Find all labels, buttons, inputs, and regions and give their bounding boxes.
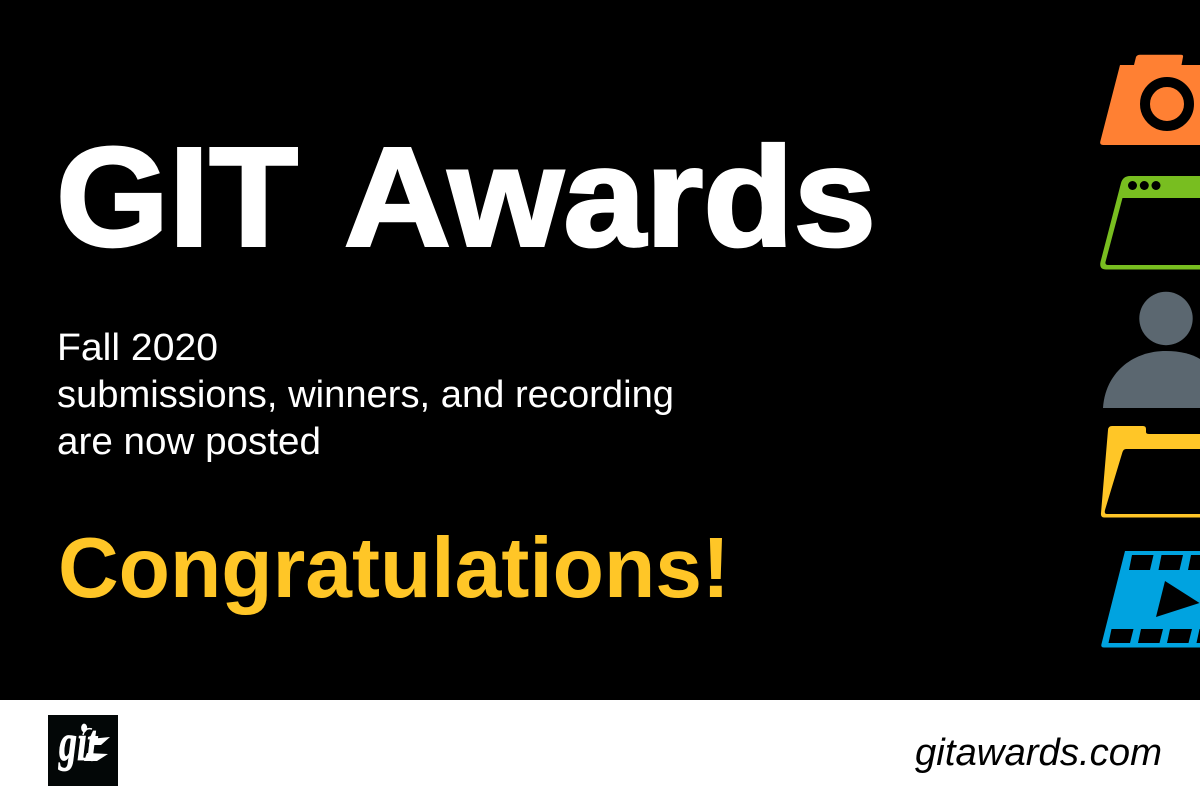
title: GIT — [56, 118, 298, 276]
logo — [48, 715, 118, 786]
congratulations heading: Congratulations! — [58, 521, 730, 616]
title — [56, 118, 876, 276]
announcement text — [57, 327, 674, 463]
icon: browser window — [1100, 176, 1200, 270]
website url: gitawards.com — [915, 732, 1162, 774]
icon: person — [1103, 292, 1200, 408]
announcement text: submissions, winners, and recording — [57, 374, 674, 416]
footer band — [0, 700, 1200, 800]
title: Awards — [344, 118, 876, 276]
icon: film strip — [1101, 551, 1200, 648]
announcement text: Fall 2020 — [57, 327, 218, 369]
logo: git — [58, 715, 98, 772]
announcement text: are now posted — [57, 421, 321, 463]
icon: camera — [1100, 55, 1200, 145]
icon: folder — [1101, 426, 1200, 518]
